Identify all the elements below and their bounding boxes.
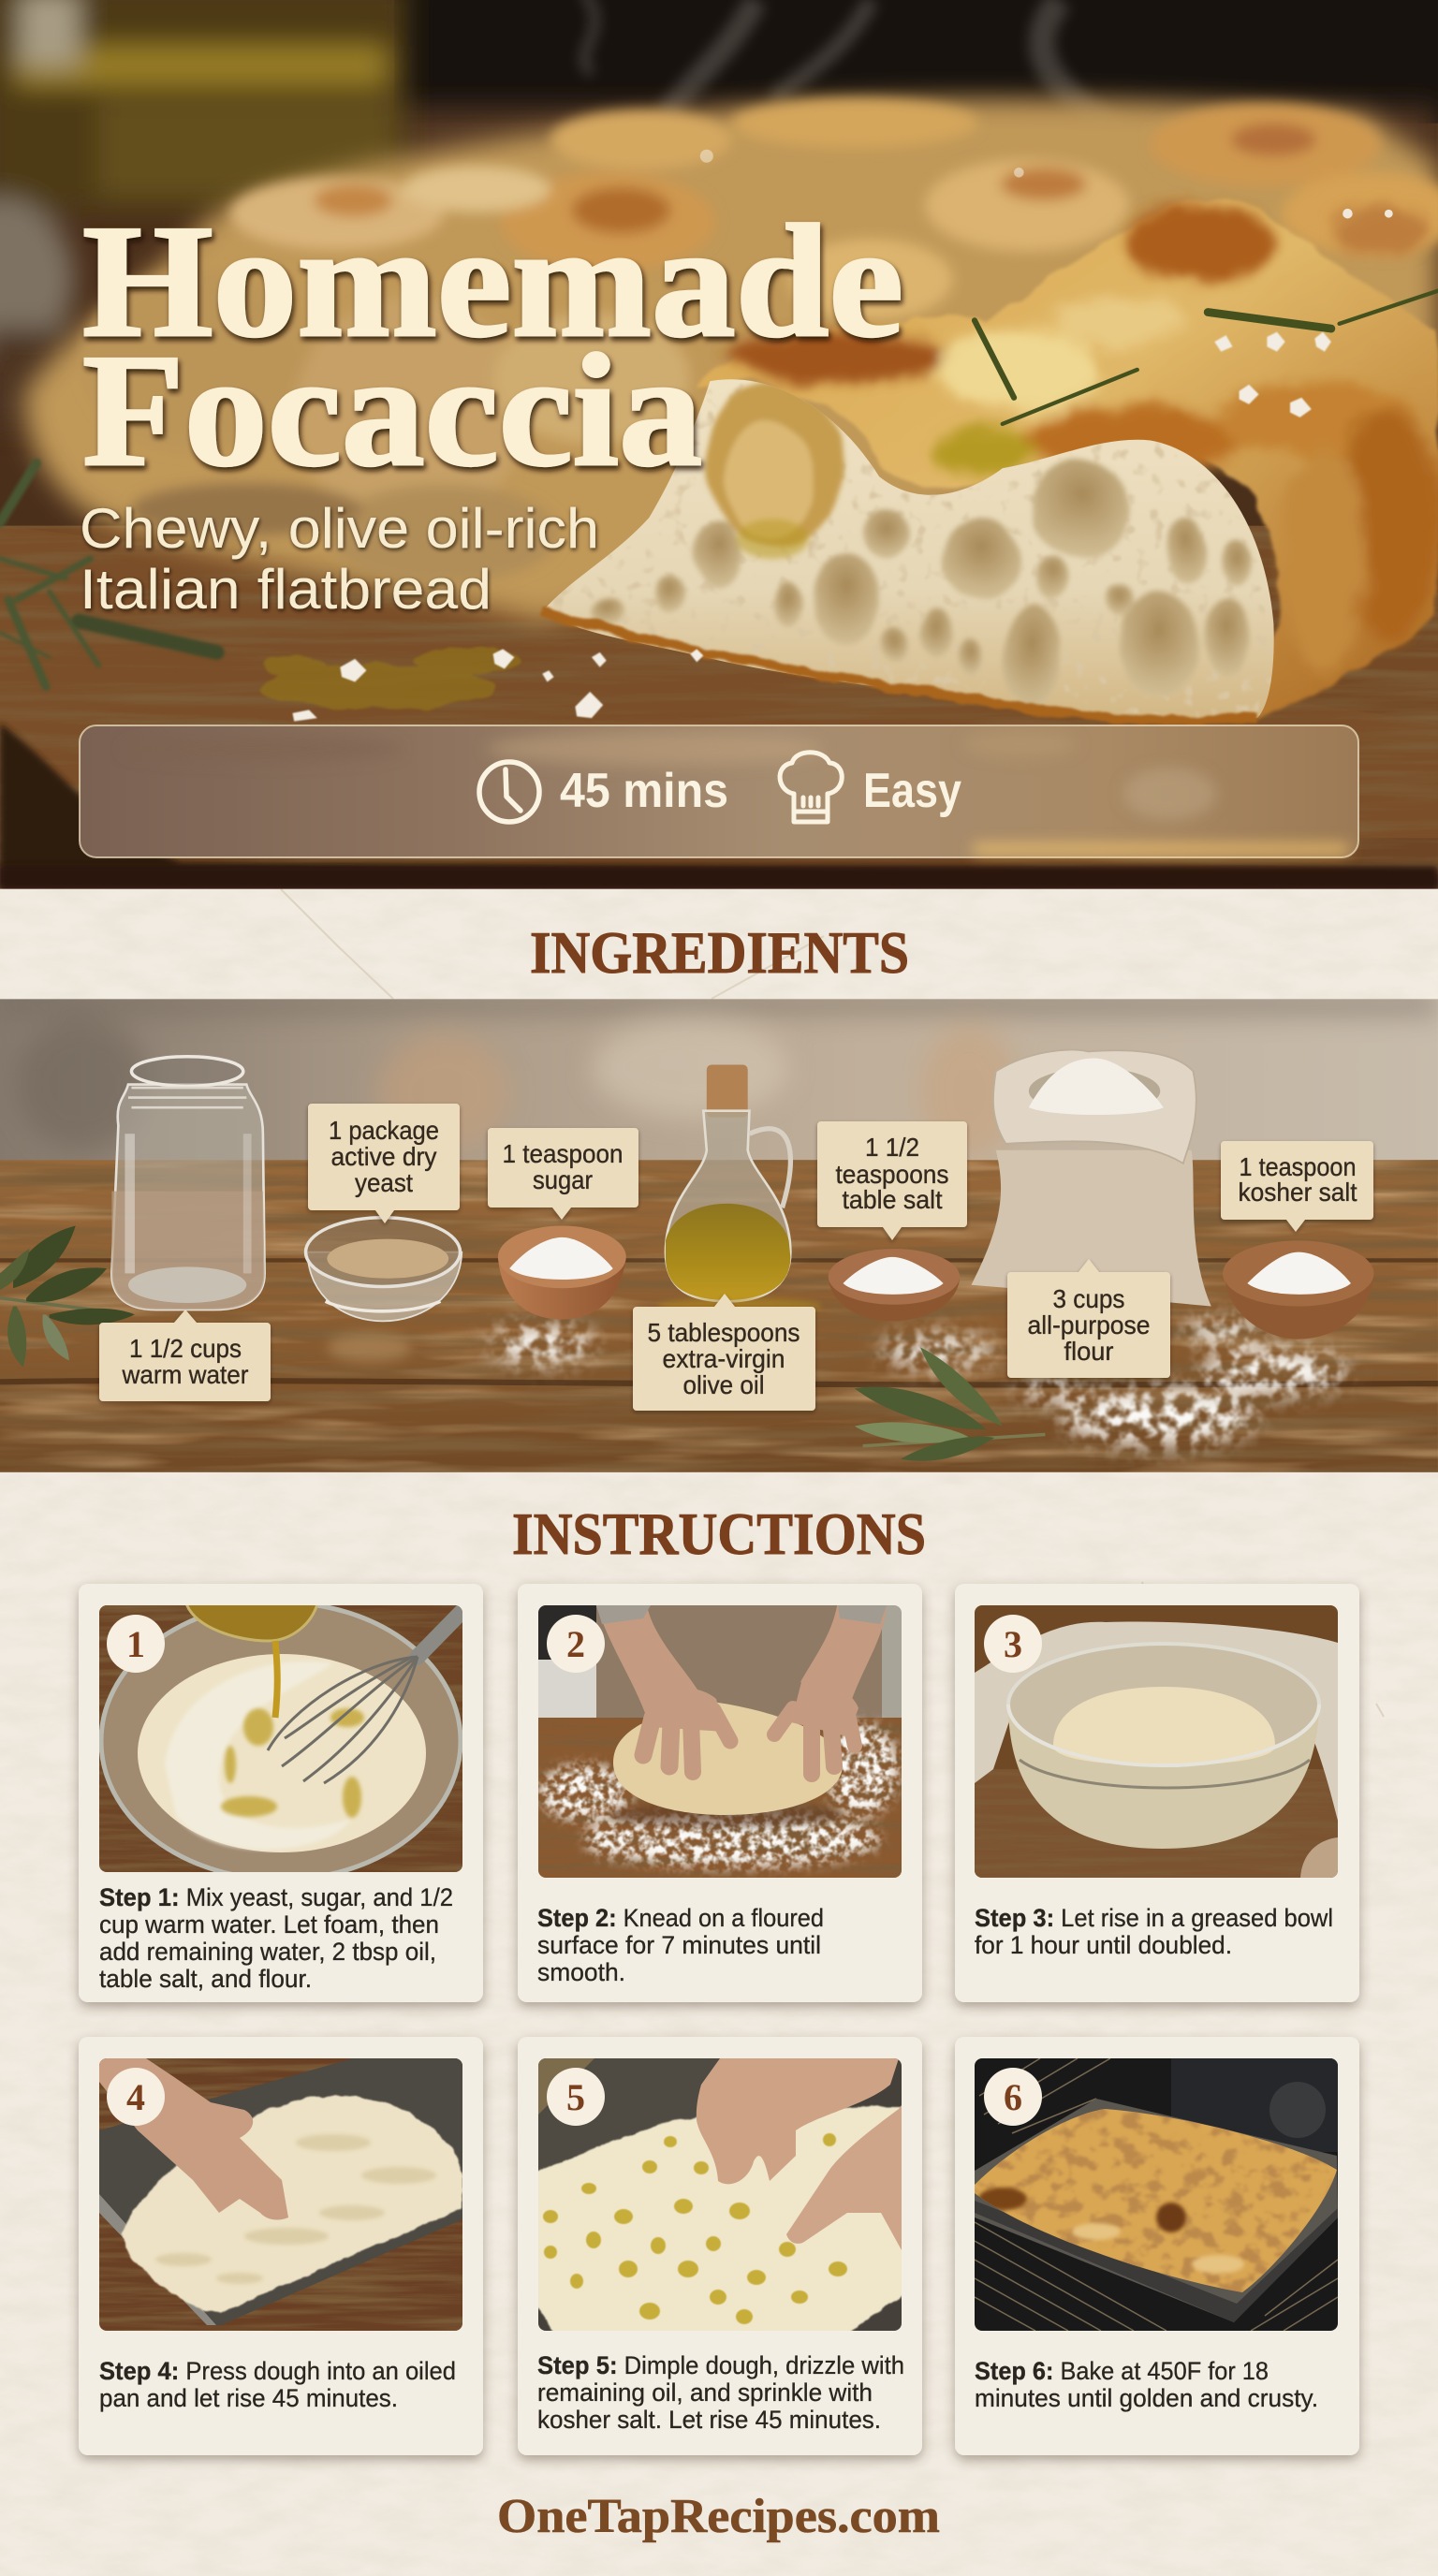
label: olive oil: 5 tablespoons bbox=[648, 1318, 800, 1347]
icon: table salt bowl bbox=[829, 1249, 960, 1321]
label: flour: flour bbox=[1064, 1337, 1114, 1366]
step 2 photo: kneading bbox=[538, 1601, 902, 1878]
hero photo: focaccia on wooden board bbox=[0, 0, 1438, 889]
icon: kosher salt bowl bbox=[1223, 1240, 1374, 1339]
step 2 text: smooth. bbox=[537, 1958, 625, 1986]
subtitle: Chewy, olive oil-rich bbox=[80, 497, 599, 560]
step 1 number badge bbox=[107, 1615, 165, 1673]
card: step 6 bbox=[955, 2037, 1359, 2455]
step 5 number badge bbox=[547, 2068, 605, 2126]
icon: olive branch centre bbox=[855, 1347, 1045, 1461]
step 3 photo: rising dough bbox=[975, 1605, 1338, 1878]
label: yeast bbox=[308, 1104, 460, 1223]
icon: flour sack bbox=[971, 1050, 1211, 1307]
step 5 number badge: 5 bbox=[566, 2076, 585, 2118]
label: sugar: 1 teaspoon bbox=[502, 1139, 624, 1168]
label: yeast: 1 package bbox=[329, 1116, 439, 1145]
icon: olive oil bottle bbox=[657, 1064, 822, 1314]
step 6 number badge bbox=[984, 2068, 1042, 2126]
card: step 4 bbox=[79, 2037, 483, 2455]
icon: yeast bowl bbox=[306, 1218, 462, 1321]
card: step 3 bbox=[955, 1584, 1359, 2002]
icon: chef hat bbox=[780, 753, 842, 822]
label: yeast: active dry bbox=[331, 1142, 436, 1171]
label: flour: all-purpose bbox=[1028, 1310, 1150, 1339]
label: flour bbox=[1007, 1259, 1170, 1378]
flour dust bbox=[490, 1318, 1347, 1446]
label: olive oil bbox=[633, 1294, 815, 1411]
arms and hands bbox=[594, 1601, 887, 1736]
label: table salt: teaspoons bbox=[835, 1160, 949, 1189]
table bbox=[0, 1160, 1438, 1472]
label: kosher salt: 1 teaspoon bbox=[1240, 1152, 1356, 1181]
card: step 2 bbox=[518, 1584, 922, 2002]
step 1 text: add remaining water, 2 tbsp oil, bbox=[99, 1938, 436, 1966]
step 1 photo: mixing bowl bbox=[99, 1601, 462, 1880]
label: table salt: 1 1/2 bbox=[865, 1133, 919, 1162]
label: warm water: warm water bbox=[122, 1360, 249, 1389]
step 5 text: Step 5: Dimple dough, drizzle with bbox=[537, 2351, 904, 2379]
step 6 text: Step 6: Bake at 450F for 18 bbox=[975, 2357, 1269, 2385]
panel: ingredients photo bbox=[0, 994, 1438, 1472]
heading: ingredients: INGREDIENTS bbox=[530, 919, 909, 986]
step 3 number badge: 3 bbox=[1004, 1623, 1022, 1665]
label: kosher salt: kosher salt bbox=[1238, 1178, 1357, 1207]
step 1 text bbox=[99, 1883, 453, 1993]
icon: clock bbox=[479, 762, 539, 822]
step 2 text: Step 2: Knead on a floured bbox=[537, 1904, 824, 1932]
step 1 text: cup warm water. Let foam, then bbox=[99, 1910, 439, 1939]
step 2 number badge: 2 bbox=[566, 1623, 585, 1665]
step 2 text bbox=[537, 1904, 824, 1986]
step 6 text bbox=[975, 2357, 1318, 2412]
label: table salt: table salt bbox=[843, 1185, 943, 1214]
heading: instructions: INSTRUCTIONS bbox=[512, 1500, 926, 1567]
step 4 number badge: 4 bbox=[126, 2076, 145, 2118]
card: step 5 bbox=[518, 2037, 922, 2455]
step 2 number badge bbox=[547, 1615, 605, 1673]
crumb bbox=[526, 361, 1299, 739]
step 1 text: Step 1: Mix yeast, sugar, and 1/2 bbox=[99, 1883, 453, 1911]
foreground crust bbox=[698, 198, 1438, 720]
steam bbox=[575, 0, 1101, 112]
step 1 text: table salt, and flour. bbox=[99, 1965, 312, 1993]
subtitle: Italian flatbread bbox=[80, 558, 492, 621]
step 3 number badge bbox=[984, 1615, 1042, 1673]
icon: olive branch left bbox=[0, 1226, 135, 1367]
step 3 text: Step 3: Let rise in a greased bowl bbox=[975, 1904, 1333, 1932]
rosemary on bread bbox=[975, 291, 1438, 424]
label: olive oil: olive oil bbox=[683, 1370, 764, 1399]
step 3 text: for 1 hour until doubled. bbox=[975, 1931, 1232, 1959]
subtitle bbox=[80, 497, 599, 621]
step 5 text: remaining oil, and sprinkle with bbox=[537, 2378, 873, 2407]
rosemary sprig left bbox=[0, 463, 217, 687]
title: Focaccia bbox=[82, 322, 702, 500]
icon: sugar bowl bbox=[498, 1226, 626, 1320]
step 6 photo: baking in oven bbox=[975, 2058, 1338, 2331]
label: warm water bbox=[99, 1310, 271, 1401]
icon: water jar bbox=[111, 1057, 265, 1310]
step 6 text: minutes until golden and crusty. bbox=[975, 2384, 1318, 2412]
card: step 1 bbox=[79, 1584, 483, 2002]
step 4 photo: pressing dough into pan bbox=[99, 2058, 462, 2331]
Easy: Easy bbox=[863, 764, 961, 818]
glass info bar bbox=[80, 725, 1358, 857]
label: kosher salt bbox=[1221, 1141, 1373, 1232]
olive oil bottle blur bbox=[0, 0, 407, 427]
step 4 text: Step 4: Press dough into an oiled bbox=[99, 2357, 456, 2385]
salt crystals bbox=[292, 332, 1331, 722]
label: sugar bbox=[488, 1128, 638, 1220]
wood board bbox=[0, 526, 1438, 838]
step 6 number badge: 6 bbox=[1004, 2076, 1022, 2118]
panel: hero bbox=[0, 0, 1438, 889]
back loaf bbox=[24, 99, 1438, 622]
step 4 text: pan and let rise 45 minutes. bbox=[99, 2384, 398, 2412]
label: yeast: yeast bbox=[355, 1168, 413, 1197]
label: flour: 3 cups bbox=[1052, 1284, 1125, 1313]
wall bbox=[0, 999, 1438, 1172]
step 2 text: surface for 7 minutes until bbox=[537, 1931, 821, 1959]
step 5 photo: dimpling dough bbox=[534, 2058, 908, 2335]
label: olive oil: extra-virgin bbox=[663, 1344, 785, 1373]
label: table salt bbox=[817, 1121, 967, 1240]
title bbox=[82, 193, 903, 500]
step 4 number badge bbox=[107, 2068, 165, 2126]
label: sugar: sugar bbox=[533, 1165, 593, 1194]
step 5 text bbox=[537, 2351, 904, 2434]
step 1 number badge: 1 bbox=[126, 1623, 145, 1665]
45 mins: 45 mins bbox=[560, 764, 728, 818]
title: Homemade bbox=[82, 193, 903, 371]
step 5 text: kosher salt. Let rise 45 minutes. bbox=[537, 2406, 881, 2434]
step 4 text bbox=[99, 2357, 456, 2412]
oil puddle bbox=[259, 649, 521, 710]
step 3 text bbox=[975, 1904, 1333, 1959]
label: warm water: 1 1/2 cups bbox=[129, 1334, 242, 1363]
footer: website: OneTapRecipes.com bbox=[497, 2490, 940, 2543]
